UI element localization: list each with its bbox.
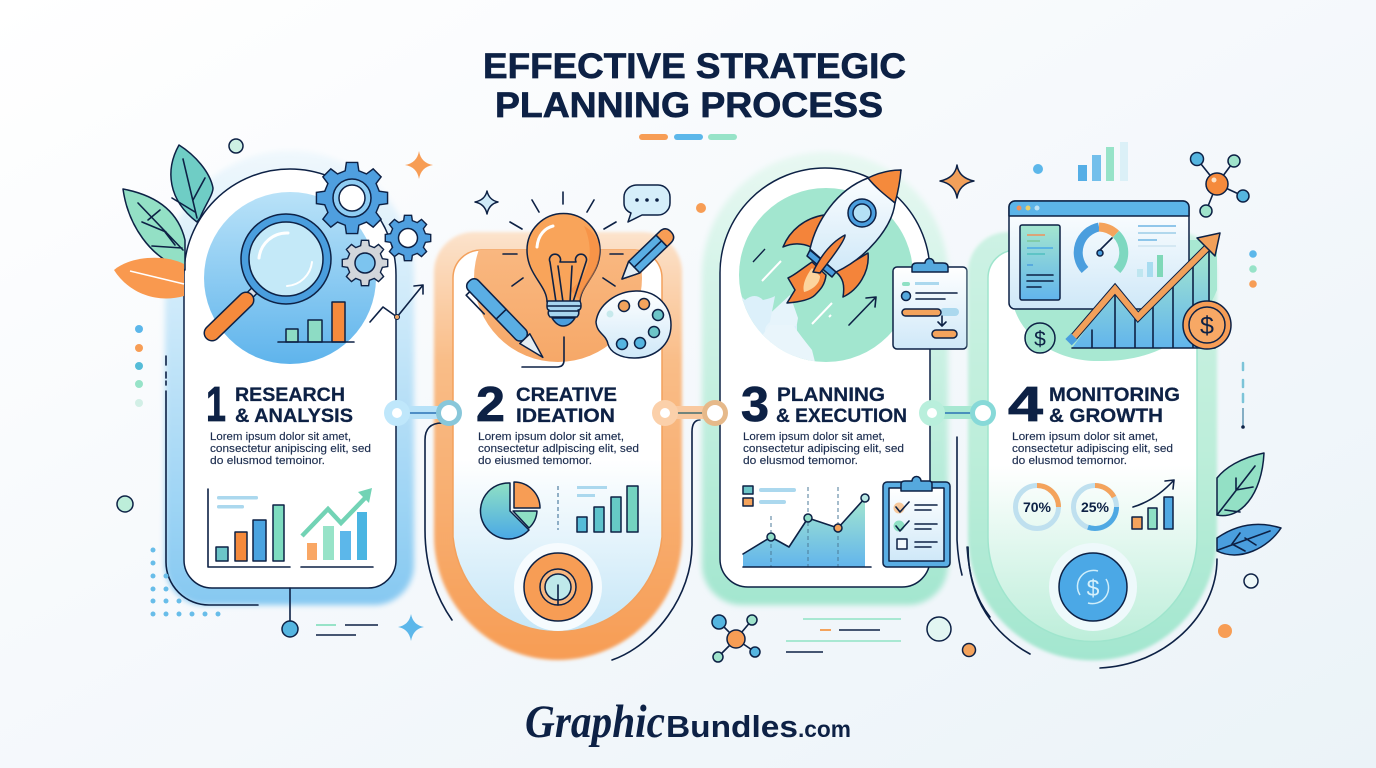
connector 1 to 2 <box>384 400 462 426</box>
panel 1 frame <box>165 150 414 605</box>
dashboard gauge <box>1078 227 1124 270</box>
divider dashes <box>557 486 559 530</box>
bar chart left <box>208 489 290 567</box>
step 1 description: do elusmod temoinor. <box>210 455 325 467</box>
icon: pen <box>461 276 548 366</box>
step 4 number: 4 <box>1008 378 1043 432</box>
panel: creative ideation <box>434 185 682 660</box>
title <box>483 47 906 125</box>
ring: orange <box>962 644 976 656</box>
panel 2 frame <box>434 232 682 660</box>
step 2 description: do eiusmed temomor. <box>478 455 592 467</box>
medallion: dollar <box>1049 543 1137 631</box>
leaf: green <box>123 189 185 270</box>
title: PLANNING PROCESS <box>495 86 883 125</box>
panel 4 frame <box>968 232 1217 660</box>
decorations: left leaves <box>114 145 213 298</box>
leaf: orange <box>114 258 184 298</box>
panel 2 card <box>453 250 662 632</box>
mini growth bars with arrow <box>1132 480 1174 529</box>
dashboard mini chart <box>1137 226 1176 277</box>
panel 2 outline strokes <box>425 420 700 660</box>
pie chart <box>480 482 540 539</box>
panel: planning and execution <box>702 152 967 605</box>
step 2 number: 2 <box>476 378 505 432</box>
leaf: teal <box>171 145 213 222</box>
donut: 70 percent <box>1016 486 1058 528</box>
step 3 number: 3 <box>741 378 769 432</box>
dashboard side list <box>1020 225 1060 300</box>
step 4 description: do elusmod temornor. <box>1012 455 1127 467</box>
icon: orange coin: $ <box>1200 312 1214 340</box>
panel 4 outline strokes <box>968 547 1217 668</box>
icon: palette <box>596 291 671 358</box>
panel 1 blue circle <box>204 192 376 364</box>
panel 3 side strokes <box>957 437 990 617</box>
decorative rings <box>117 139 243 512</box>
step 3 heading: PLANNING <box>777 384 885 406</box>
logo: Graphic <box>525 696 665 748</box>
leaf: blue <box>1217 524 1281 555</box>
step 1 description <box>210 431 371 467</box>
icon: light bulb <box>527 214 600 326</box>
icon: dollar badge: $ <box>1034 328 1046 351</box>
growth chart with arrow <box>1065 233 1220 348</box>
logo <box>525 696 851 748</box>
step 1 heading: RESEARCH <box>235 384 345 406</box>
right dashed line <box>1241 363 1245 429</box>
donut: 25 percent <box>1074 486 1116 528</box>
right leaves <box>1217 453 1281 555</box>
motion lines <box>753 249 876 325</box>
bar chart right with arrow <box>301 488 373 567</box>
bottom line accents <box>786 619 901 652</box>
connector 2 to 3 <box>652 400 728 426</box>
step 4 heading: MONITORING <box>1049 384 1180 406</box>
star: outline <box>475 191 498 214</box>
left outline stroke <box>166 356 258 605</box>
step 2 heading: IDEATION <box>516 405 615 427</box>
step 4 description: consectetur adipiscing elit, sed <box>1012 443 1173 455</box>
title accent bars <box>639 134 737 140</box>
connector 3 to 4 <box>919 400 996 426</box>
panel 1 card <box>184 169 396 588</box>
bar chart <box>577 486 638 532</box>
step 3 heading: & EXECUTION <box>776 405 907 427</box>
dot grid <box>150 548 220 616</box>
step 2 description <box>478 431 639 467</box>
logo: .com <box>798 716 851 742</box>
step 4 heading <box>1049 384 1180 427</box>
icon: rays <box>503 192 623 286</box>
trend arrow <box>370 285 423 322</box>
bottom node and lines, panel 1 <box>282 588 378 637</box>
panel: research and analysis <box>165 150 431 605</box>
right dots <box>1249 250 1257 288</box>
icon: magnifying glass <box>212 214 331 333</box>
step 1 heading: & ANALYSIS <box>235 405 353 427</box>
donut: 70 percent: 70% <box>1023 499 1052 515</box>
panel 3 frame <box>702 152 948 605</box>
step 1 description: consectetur anipiscing elit, sed <box>210 443 371 455</box>
panel: monitoring and growth <box>968 201 1231 660</box>
medallion: dollar: $ <box>1087 575 1100 601</box>
step 4 heading: & GROWTH <box>1049 405 1163 427</box>
star: orange <box>405 151 433 179</box>
panel 4 green circle <box>1012 240 1217 361</box>
step 2 heading: CREATIVE <box>516 384 617 406</box>
step 2 description: Lorem ipsum dolor sit amet, <box>478 431 624 443</box>
line chart <box>743 486 871 567</box>
left column dots <box>135 325 143 407</box>
icon: checklist clipboard <box>883 477 950 567</box>
bulb wire <box>522 337 564 367</box>
cloud and exhaust <box>742 295 815 361</box>
ring: white <box>1244 574 1258 588</box>
icon: gantt clipboard <box>893 258 967 349</box>
step 3 description: consectetur adipiscing elit, sed <box>743 443 904 455</box>
donut: 25 percent: 25% <box>1081 499 1110 515</box>
molecule: top right <box>1190 152 1249 217</box>
medallion: target <box>514 543 602 631</box>
panel 3 card <box>720 168 930 587</box>
step 4 description <box>1012 431 1173 467</box>
step 1 number: 1 <box>206 378 226 432</box>
icon: speech bubble <box>624 185 670 222</box>
panel 4 card <box>988 250 1197 642</box>
icon: orange coin <box>1183 301 1231 349</box>
leaf veins <box>1217 466 1270 551</box>
step 3 description <box>743 431 904 467</box>
icon: rocket <box>783 170 901 303</box>
title: EFFECTIVE STRATEGIC <box>483 47 906 86</box>
molecule: bottom <box>712 615 760 662</box>
step 4 description: Lorem ipsum dolor sit amet, <box>1012 431 1158 443</box>
small bar chart <box>278 302 354 342</box>
logo: Bundles <box>666 709 798 744</box>
icon: dollar badge <box>1025 323 1055 353</box>
leaf veins <box>138 159 205 250</box>
step 2 heading <box>516 384 617 427</box>
panel 2 orange circle <box>474 250 642 362</box>
step 3 description: Lorem ipsum dolor sit amet, <box>743 431 885 443</box>
leaf: green <box>1217 453 1264 516</box>
icon: gears <box>316 162 431 286</box>
star: orange outline <box>940 165 974 198</box>
dot: orange <box>696 203 706 213</box>
step 2 description: consectetur adlpiscing elit, sed <box>478 443 639 455</box>
step 1 heading <box>235 384 353 427</box>
step 3 heading <box>776 384 907 427</box>
icon: pencil <box>616 226 676 285</box>
panel 3 green circle <box>739 188 913 362</box>
step 3 description: do elusmod temomor. <box>743 455 858 467</box>
star: blue <box>398 614 424 641</box>
step 1 description: Lorem ipsum dolor sit amet, <box>210 431 351 443</box>
ring: green <box>927 617 951 641</box>
icon: dashboard window <box>1009 201 1189 309</box>
mini bars top right <box>1033 142 1128 181</box>
dot: orange <box>1218 624 1232 638</box>
